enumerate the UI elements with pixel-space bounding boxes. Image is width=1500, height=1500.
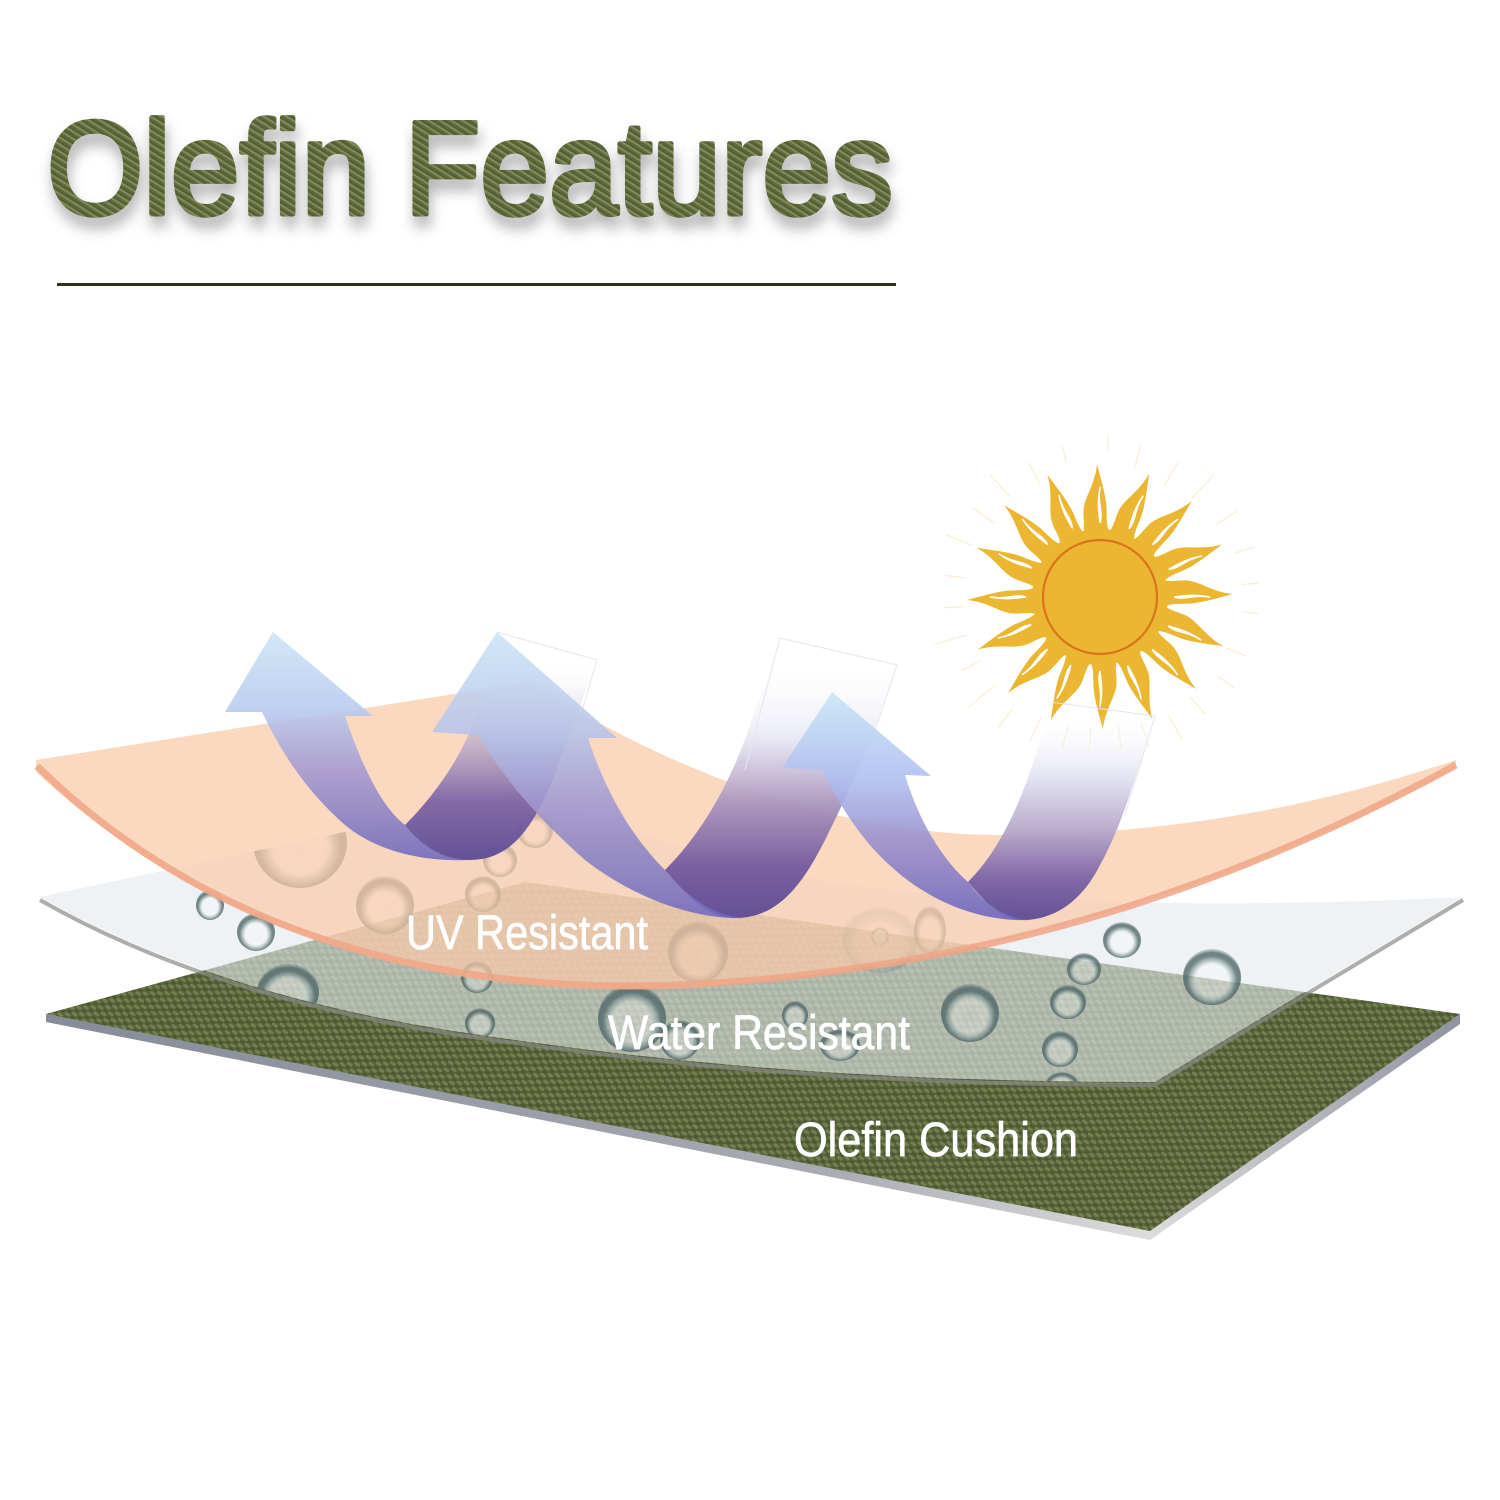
- label: Olefin Cushion: Olefin Cushion: [794, 1114, 1078, 1167]
- label: UV Resistant: UV Resistant: [406, 907, 648, 960]
- arrow: second UV reflection: [432, 632, 897, 918]
- layer: water resistant film: [40, 793, 1463, 1085]
- label: Water Resistant: Water Resistant: [608, 1007, 910, 1060]
- layer: UV resistant film: [36, 682, 1456, 989]
- layer: olefin cushion fabric: [46, 882, 1460, 1240]
- sun: [935, 435, 1258, 754]
- arrow: third UV reflection: [782, 692, 1155, 920]
- arrow: first UV reflection: [225, 632, 597, 860]
- water droplets: [196, 813, 1241, 1082]
- title: Olefin Features: [47, 95, 893, 243]
- infographic: Olefin Features: [34, 115, 1464, 1240]
